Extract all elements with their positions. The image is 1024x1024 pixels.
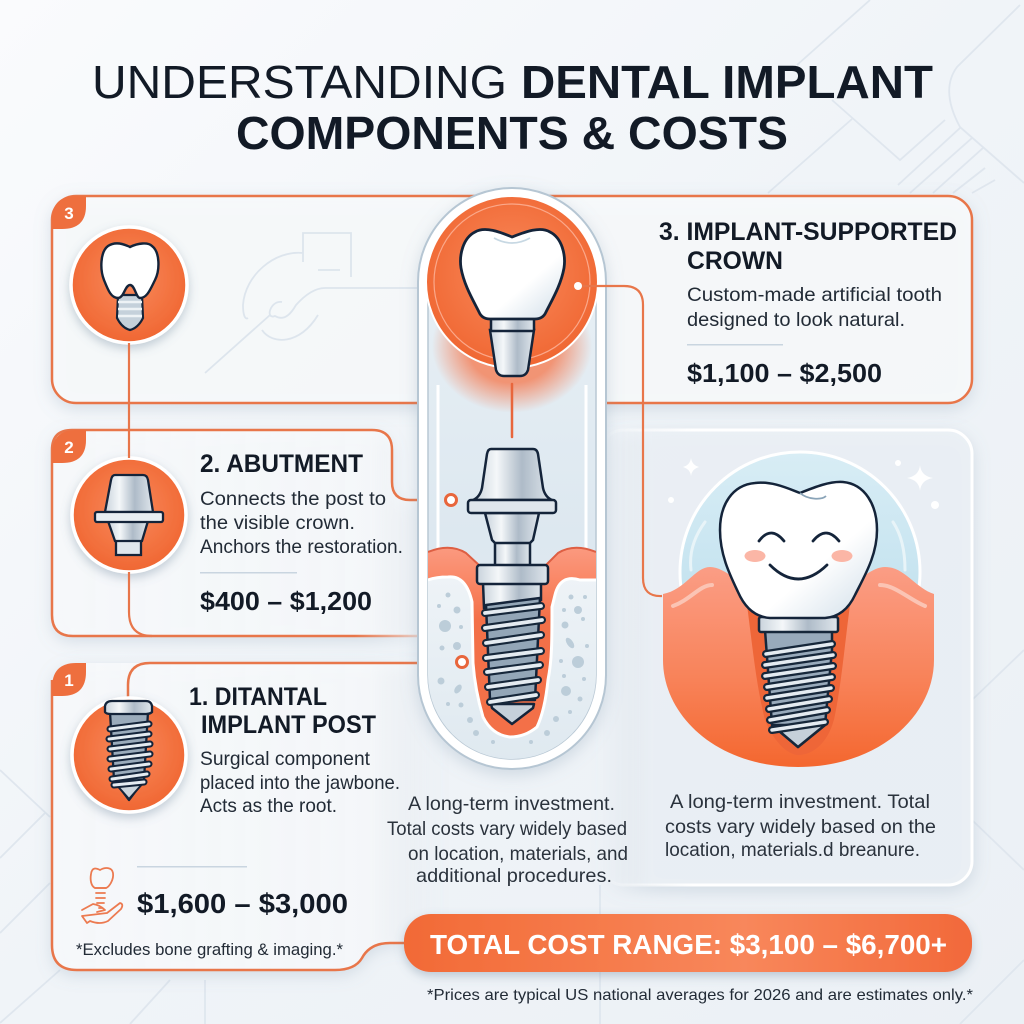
description: Anchors the restoration.	[200, 536, 403, 558]
capsule shell	[418, 188, 606, 769]
number badge 1: 1	[64, 671, 74, 690]
illustration: smiling tooth implant	[663, 452, 939, 767]
text: investment note center	[387, 793, 628, 887]
connector lines between icons	[129, 343, 152, 636]
total cost pill: TOTAL COST RANGE: $3,100 – $6,700+	[430, 929, 947, 960]
heading: 3. IMPLANT-SUPPORTED	[659, 218, 957, 246]
background line drawing	[205, 233, 420, 373]
gum tissue	[428, 548, 596, 737]
description: Acts as the root.	[200, 795, 337, 817]
text: investment note center: Total costs vary widely based	[387, 818, 627, 840]
description: the visible crown.	[200, 512, 355, 534]
text: investment note right: costs vary widely based on the	[665, 816, 936, 838]
text: investment note right: A long-term investment. Total	[670, 791, 930, 813]
icon: implant post	[72, 698, 186, 812]
heading: 1. DITANTAL	[189, 683, 327, 711]
icon: abutment	[72, 458, 186, 572]
price: $1,600 – $3,000	[137, 888, 348, 919]
icon: tooth implant on hand	[82, 868, 122, 923]
panel frame	[52, 196, 972, 403]
total cost pill	[404, 914, 972, 972]
panel fill and frame	[52, 663, 440, 970]
callout dot: crown	[574, 282, 582, 290]
panel: abutment	[52, 430, 444, 636]
description	[687, 284, 942, 331]
panel: implant-supported crown	[52, 196, 972, 403]
abutment	[468, 449, 556, 566]
text: investment note right	[665, 791, 936, 861]
description: Surgical component	[200, 748, 371, 770]
exclusion note: *Excludes bone grafting & imaging.*	[76, 941, 344, 959]
number badge 1	[52, 663, 86, 696]
description: Custom-made artificial tooth	[687, 284, 942, 306]
crown tooth with neck	[461, 229, 564, 376]
implant post screw	[477, 565, 548, 724]
panel: dental implant post	[52, 663, 456, 970]
text: investment note right: location, materials.d breanure.	[665, 839, 920, 861]
heading: 2. ABUTMENT	[200, 450, 363, 478]
text: investment note center: additional procedures.	[416, 865, 612, 887]
callout dot: post	[456, 656, 468, 668]
capsule: exploded implant diagram	[418, 188, 606, 769]
number badge 3	[52, 196, 86, 229]
footnote: *Prices are typical US national averages for 2026 and are estimates only.*	[427, 987, 973, 1004]
description: placed into the jawbone.	[200, 772, 400, 794]
callout dot: abutment	[446, 494, 456, 506]
description: Connects the post to	[200, 488, 386, 510]
price: $400 – $1,200	[200, 586, 372, 616]
capsule interior	[428, 198, 596, 759]
panel: lower right smiling tooth	[600, 430, 972, 885]
text: investment note center: A long-term investment.	[408, 793, 615, 815]
title	[92, 56, 933, 159]
description	[200, 488, 403, 558]
text: investment note center: on location, materials, and	[408, 843, 628, 865]
panel background	[600, 430, 972, 885]
title: COMPONENTS & COSTS	[236, 107, 788, 159]
connector arrow crown to abutment	[511, 384, 513, 437]
icon: crown with implant	[71, 227, 187, 343]
heading: CROWN	[687, 247, 783, 275]
number badge 2	[52, 430, 86, 463]
title: DENTAL IMPLANT	[521, 56, 933, 108]
heading: IMPLANT POST	[201, 711, 376, 739]
jaw bone	[428, 577, 596, 762]
title: UNDERSTANDING	[92, 56, 507, 108]
callout line: crown to smiling tooth	[582, 286, 662, 596]
number badge 3: 3	[64, 204, 74, 223]
heading	[659, 218, 957, 275]
description: designed to look natural.	[687, 309, 905, 331]
panel fill and frame	[52, 430, 440, 636]
crown highlight circle	[426, 196, 598, 368]
description	[200, 748, 400, 817]
number badge 2: 2	[64, 438, 74, 457]
price: $1,100 – $2,500	[687, 358, 882, 388]
heading	[189, 683, 376, 739]
